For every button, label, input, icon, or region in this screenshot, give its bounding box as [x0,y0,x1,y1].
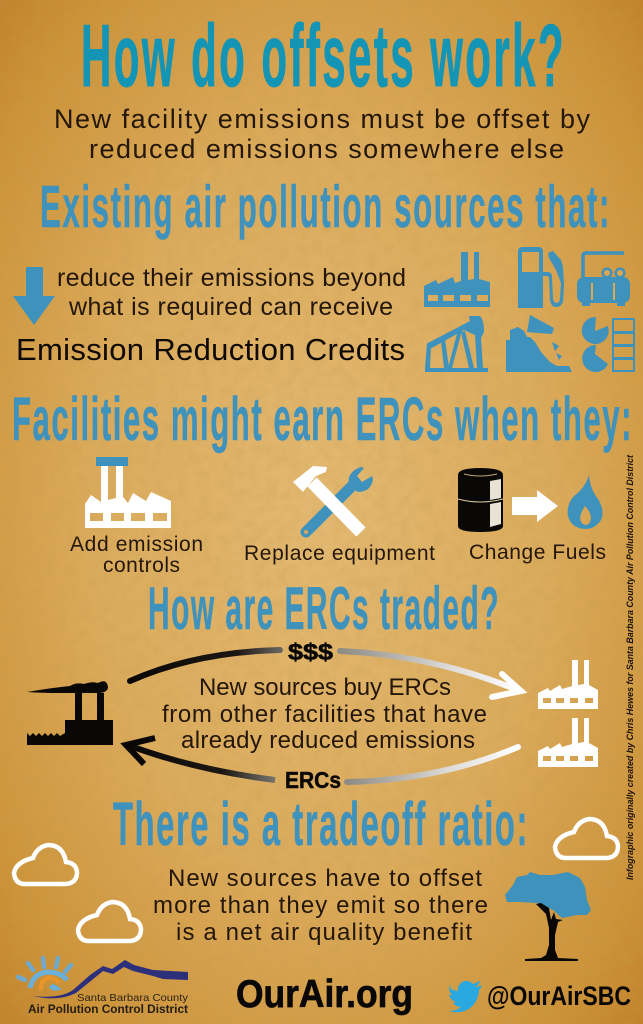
icon: compressor [577,253,630,306]
hammer [293,466,361,532]
icon: fuel pump [518,247,564,308]
intro text: New facility emissions must be offset by [54,104,590,134]
icon: white factory top [538,660,598,709]
arrow: ERC flow [126,738,518,782]
icon: cloud right [555,819,618,858]
icon: factory with emission control [85,457,171,528]
text: tradeoff description: more than they emit so there [153,892,488,919]
label: add emission controls: Add emission [70,533,203,556]
mountain ridge [33,960,188,998]
county name: Santa Barbara County [77,992,189,1004]
text: emission reduction credits: Emission Reduction Credits [16,332,405,367]
label: $$$: $$$ [288,639,333,665]
icon: pump jack [425,316,488,372]
icons: pollution source types [424,247,635,372]
text: trading description [162,674,487,754]
text: trading description: already reduced emissions [181,727,475,754]
icon: cloud lower [78,902,141,941]
icon: landfill truck [506,315,572,372]
label: replace equipment: Replace equipment [244,542,435,565]
icon: white factory bottom [538,718,598,767]
icon: factory [424,252,490,307]
icon: white arrow [512,490,558,522]
intro text: reduced emissions somewhere else [89,134,564,164]
label: add emission controls [70,533,203,577]
website: OurAir.org [236,973,413,1016]
text: trading description: New sources buy ERCs [199,674,451,701]
label: ERCs: ERCs [285,767,341,793]
icon: cloud left [14,845,77,884]
sun arcs [30,972,67,988]
icon: hammer and wrench [293,466,373,534]
sun rays [18,958,71,980]
icon: black polluting factory [27,681,113,745]
icon: tree [505,872,591,961]
icon: pie charts and table [582,317,635,372]
icon: gas flame [568,475,602,529]
label: change fuels: Change Fuels [469,541,606,564]
wrench [304,467,373,534]
intro text [54,104,590,164]
text: trading description: from other facilities that have [162,701,487,728]
text: tradeoff description: is a net air quality benefit [176,919,472,946]
text: tradeoff description: New sources have to offset [168,865,482,892]
arrow: money flow [130,650,521,697]
credit: vertical text: Infographic originally created by Chris Hewes for Santa Barbara County Air Pollution Control District [625,454,636,880]
text: tradeoff description [153,865,488,946]
text: reduce emissions: what is required can receive [68,293,393,321]
icon: twitter bird [449,981,482,1012]
text: reduce emissions: reduce their emissions beyond [57,264,406,292]
icon: down arrow [13,267,55,325]
logo: Santa Barbara County APCD [18,958,189,1016]
text: reduce emissions [57,264,406,321]
label: add emission controls: controls [103,554,180,577]
icon: oil barrel [458,468,503,532]
district name: Air Pollution Control District [28,1002,188,1016]
